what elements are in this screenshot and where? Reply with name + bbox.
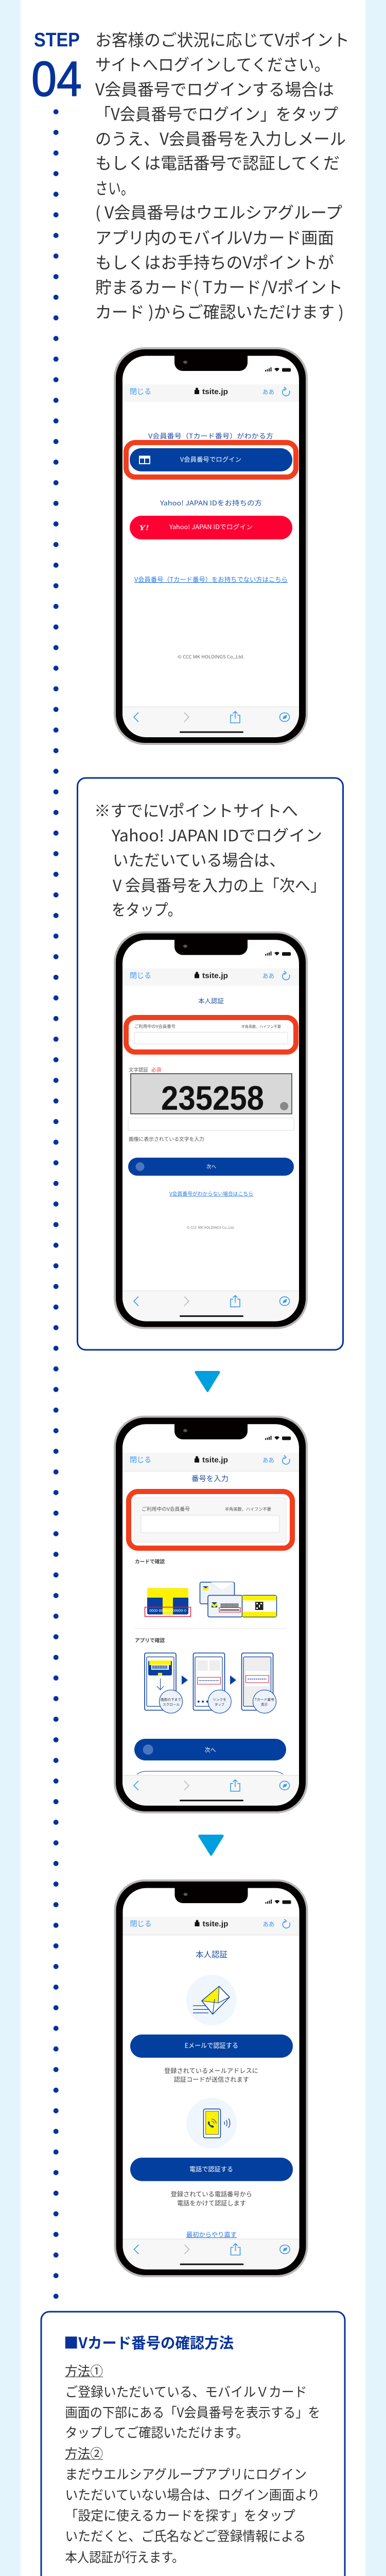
- app step 1: スクロール: [163, 1702, 180, 1706]
- button: Yahoo login: Yahoo! JAPAN IDでログイン: [169, 522, 253, 531]
- step instruction text: お客様のご状況に応じてVポイント: [95, 27, 349, 51]
- T card illustration: [145, 1588, 190, 1617]
- label: check in app: アプリで確認: [135, 1636, 165, 1643]
- member number field: [134, 1024, 288, 1044]
- step badge: STEP: [34, 29, 80, 51]
- method 1 label: 方法①: [65, 2361, 103, 2380]
- step instruction text: V会員番号でログインする場合は: [95, 77, 334, 100]
- step instruction text: のうえ、V会員番号を入力しメール: [95, 126, 346, 150]
- panel heading: ■Vカード番号の確認方法: [64, 2331, 234, 2353]
- method 2 text: 「設定に使えるカードを探す」をタップ: [65, 2505, 295, 2524]
- app step 3: Tカード番号: [255, 1697, 275, 1702]
- step instruction text: アプリ内のモバイルVカード画面: [95, 225, 334, 249]
- app step 2: タップ: [215, 1701, 224, 1706]
- browser bottom bar: [122, 707, 299, 737]
- member number field: 半角英数、ハイフン不要: [241, 1024, 281, 1029]
- step instruction text: 貯まるカード( Tカード/Vポイント: [95, 275, 343, 298]
- app step 2: [194, 1653, 231, 1713]
- screen title: 番号を入力: [191, 1473, 229, 1484]
- button: next: [128, 1158, 294, 1176]
- button: Yahoo login: [130, 516, 292, 539]
- arrow down 1: [195, 1371, 220, 1392]
- browser bottom bar: [122, 2239, 300, 2269]
- arrow: app step: [182, 1675, 188, 1685]
- method 1 text: ご登録いただいている、モバイルＶカード: [65, 2382, 307, 2401]
- button: V member login: [130, 448, 292, 471]
- icon: phone call: [186, 2098, 237, 2148]
- member number field: ご利用中のV会員番号: [134, 1024, 176, 1029]
- captcha label: 文字認証: [129, 1066, 148, 1073]
- button: next: 次へ: [206, 1163, 216, 1170]
- captcha label: [129, 1066, 161, 1073]
- phone 3: enter number screen: ああ: [262, 1456, 274, 1465]
- app step 1: [145, 1653, 182, 1713]
- captcha input: [128, 1118, 294, 1130]
- red highlight frame: [129, 1492, 292, 1548]
- method 1 text: [65, 2382, 320, 2442]
- phone 2: identity check with captcha: tsite.jp: [202, 972, 228, 980]
- method 2 text: [65, 2464, 320, 2566]
- next card edge: [137, 1771, 283, 1774]
- method 2 text: いただいていない場合は、ログイン画面より: [65, 2485, 320, 2504]
- step instruction text: さい。: [95, 176, 134, 199]
- helper text: 画像に表示されている文字を入力: [129, 1136, 204, 1143]
- panel: note for users already logged in: [77, 778, 343, 1350]
- note text: をタップ。: [112, 897, 182, 920]
- note text: [94, 798, 326, 920]
- step badge: 04: [31, 52, 82, 107]
- method 2 text: 本人認証が行えます。: [65, 2547, 184, 2566]
- step instruction text: サイトへログインしてください。: [95, 52, 330, 76]
- captcha image: 235258: [161, 1079, 264, 1117]
- screen title: 本人認証: [196, 1948, 227, 1960]
- app step 1: 画面の下まで: [161, 1697, 181, 1702]
- phone 2: identity check with captcha: 閉じる: [130, 971, 151, 981]
- link text: 最初からやり直す: [186, 2230, 237, 2239]
- app step 3: 表示: [261, 1701, 268, 1706]
- arrow down 2: [198, 1835, 224, 1856]
- note text: Yahoo! JAPAN IDでログイン: [111, 823, 322, 846]
- copyright: © CCC MK HOLDINGS Co.,Ltd.: [178, 654, 244, 660]
- note text: V 会員番号を入力の上「次へ」: [113, 873, 326, 896]
- captcha label: 必須: [151, 1066, 161, 1073]
- button: phone verification: [130, 2158, 293, 2181]
- dotted timeline line: [54, 112, 59, 2576]
- step instruction text: カード )からご確認いただけます ): [95, 299, 344, 323]
- copyright: © CCC MK HOLDINGS Co.,Ltd.: [187, 1225, 235, 1230]
- step instruction text: 「V会員番号でログイン」をタップ: [95, 101, 338, 125]
- icon: email: [186, 1975, 237, 2025]
- method 1 text: 画面の下部にある「V会員番号を表示する」を: [65, 2402, 320, 2421]
- button: next: [134, 1739, 286, 1760]
- phone description: 登録されている電話番号から: [171, 2189, 252, 2198]
- phone 4: verification method screen: 閉じる: [130, 1919, 151, 1929]
- panel: how to check V card number: [41, 2312, 345, 2576]
- phone 2: identity check with captcha: [114, 931, 308, 1329]
- step instruction text: もしくはお手持ちのVポイントが: [95, 250, 334, 274]
- V card and QR illustration: [200, 1582, 277, 1617]
- phone 3: enter number screen: [114, 1416, 308, 1814]
- browser bottom bar: [122, 1775, 299, 1806]
- label: check with card: カードで確認: [135, 1558, 165, 1565]
- phone description: 電話をかけて認証します: [177, 2198, 246, 2207]
- method 2 text: いただくと、ご氏名などご登録情報による: [65, 2526, 306, 2545]
- step instruction text: もしくは電話番号で認証してくだ: [95, 150, 340, 174]
- button: email verification: Eメールで認証する: [185, 2040, 238, 2050]
- app step 2: リンクを: [213, 1697, 226, 1702]
- phone 1: login choice screen: 閉じる: [130, 386, 151, 397]
- red highlight frame: [126, 1018, 296, 1052]
- divider: [134, 1628, 286, 1629]
- email description: 登録されているメールアドレスに: [164, 2066, 258, 2075]
- email description: [164, 2066, 258, 2083]
- method 2 text: まだウエルシアグループアプリにログイン: [65, 2464, 307, 2483]
- method 1 text: タップしてご確認いただけます。: [65, 2422, 248, 2442]
- screen title: 本人認証: [198, 996, 224, 1005]
- red highlight frame: [126, 443, 296, 477]
- T card illustration: 0000-0000-0000000-0: [149, 1607, 186, 1613]
- phone 4: verification method screen: ああ: [262, 1920, 275, 1928]
- phone 1: login choice screen: [114, 347, 308, 745]
- button: next: 次へ: [205, 1745, 216, 1754]
- phone 2: identity check with captcha: ああ: [262, 972, 274, 980]
- step instruction text: [95, 27, 349, 323]
- phone 4: verification method screen: tsite.jp: [203, 1920, 229, 1928]
- app step 3: [242, 1653, 276, 1713]
- step instruction text: ( V会員番号はウエルシアグループ: [95, 200, 342, 224]
- phone 1: login choice screen: ああ: [262, 387, 274, 396]
- heading: Yahoo ID: Yahoo! JAPAN IDをお持ちの方: [160, 498, 262, 507]
- button: V member login: V会員番号でログイン: [180, 455, 241, 464]
- member number panel: [134, 1498, 286, 1542]
- phone description: [171, 2189, 252, 2207]
- button: email verification: [130, 2035, 293, 2058]
- member number panel: ご利用中のV会員番号: [142, 1505, 190, 1513]
- button: Yahoo login: Y!: [139, 524, 149, 532]
- heading: V member number: V会員番号（Tカード番号）がわかる方: [148, 431, 273, 440]
- phone 4: verification method screen: [114, 1879, 308, 2277]
- phone 3: enter number screen: 閉じる: [130, 1455, 151, 1465]
- captcha image: [131, 1074, 292, 1117]
- member number panel: 半角英数、ハイフン不要: [225, 1506, 271, 1512]
- button: phone verification: 電話で認証する: [189, 2164, 233, 2173]
- phone 1: login choice screen: tsite.jp: [202, 387, 228, 396]
- link text: V会員番号（Tカード番号）をお持ちでない方はこちら: [134, 575, 288, 584]
- note text: いただいている場合は、: [113, 848, 285, 871]
- email description: 認証コードが送信されます: [174, 2074, 249, 2083]
- method 2 label: 方法②: [65, 2444, 103, 2463]
- arrow: app step: [230, 1675, 236, 1685]
- note text: ※すでにVポイントサイトへ: [94, 798, 298, 821]
- phone 3: enter number screen: tsite.jp: [202, 1456, 228, 1465]
- link text: V会員番号がわからない場合はこちら: [169, 1190, 253, 1197]
- browser bottom bar: [122, 1291, 299, 1321]
- step badge: [31, 29, 82, 107]
